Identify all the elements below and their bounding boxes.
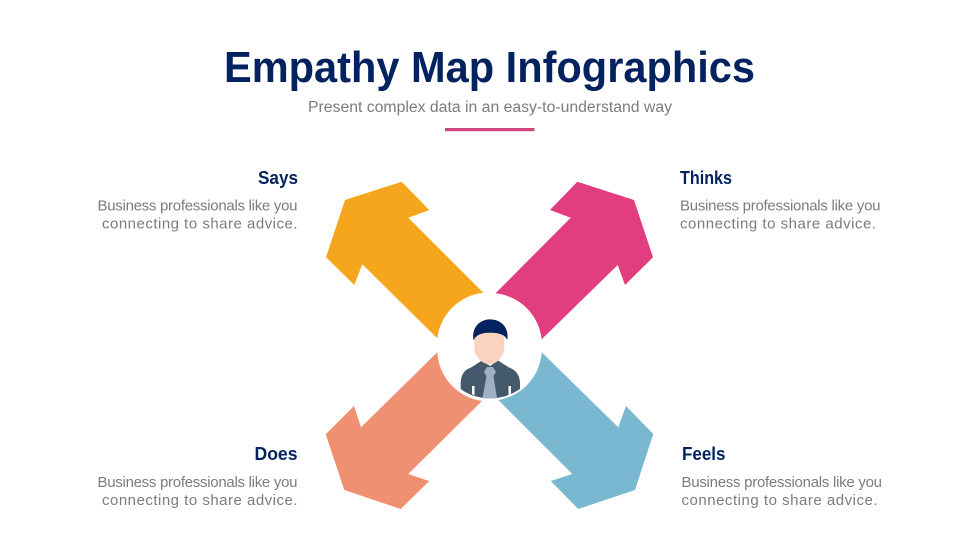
tie — [482, 367, 497, 398]
text block: does — [98, 443, 298, 509]
title: Empathy Map Infographics — [224, 43, 755, 92]
face — [474, 331, 504, 364]
text block: says — [98, 167, 298, 232]
text block: does: Does — [254, 443, 298, 464]
text block: feels: Feels — [682, 443, 726, 464]
arrow: says (yellow) — [326, 182, 483, 338]
arrow: thinks (pink) — [496, 182, 653, 339]
text block: says: Business professionals like you — [98, 198, 298, 214]
text block: thinks — [680, 167, 880, 232]
arrow: feels (blue) — [498, 352, 653, 509]
arrow: does (coral) — [326, 352, 482, 509]
text block: feels: connecting to share advice. — [682, 492, 878, 509]
subtitle: Present complex data in an easy-to-understand way — [308, 99, 672, 116]
title underline — [445, 128, 534, 131]
jacket — [461, 360, 520, 398]
text block: does: connecting to share advice. — [102, 492, 298, 509]
icon: person — [461, 319, 520, 398]
text block: feels: Business professionals like you — [682, 474, 882, 491]
hair — [473, 319, 508, 340]
text block: does: Business professionals like you — [98, 474, 298, 491]
text block: says: Says — [258, 167, 298, 188]
text block: thinks: connecting to share advice. — [680, 216, 876, 232]
text block: feels — [682, 443, 882, 509]
text block: thinks: Business professionals like you — [680, 198, 880, 214]
text block: thinks: Thinks — [680, 167, 732, 188]
shirt slits — [472, 386, 511, 396]
text block: says: connecting to share advice. — [102, 216, 298, 232]
